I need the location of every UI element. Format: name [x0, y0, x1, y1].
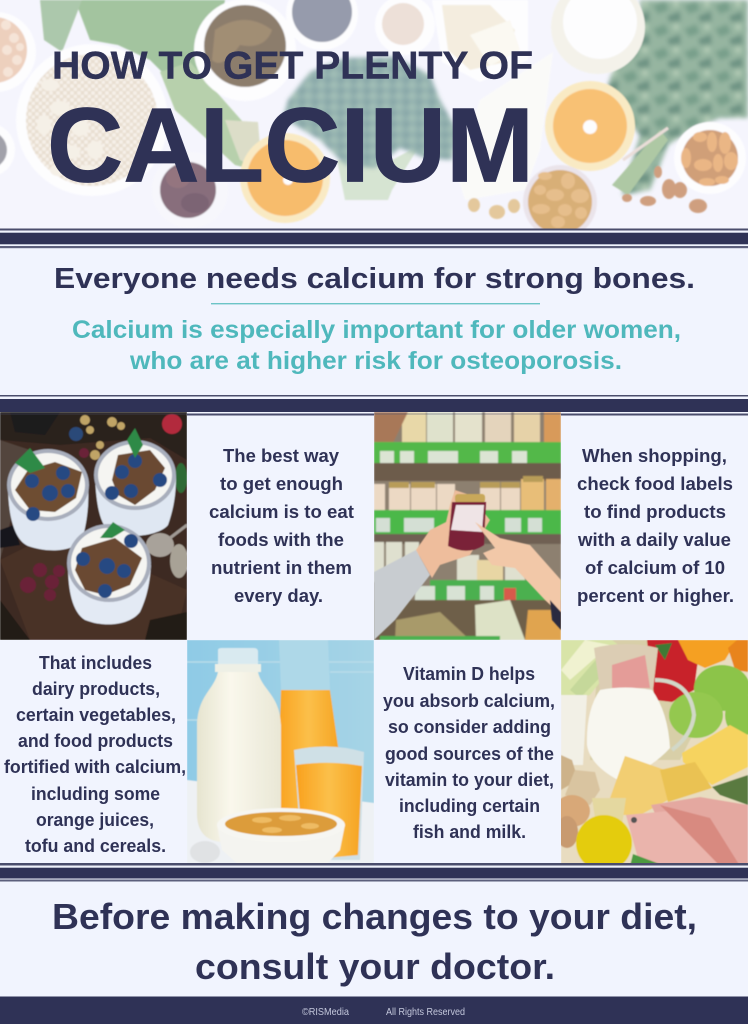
text block: vitamin d — [383, 664, 555, 842]
title: how to get plenty of: HOW TO GET PLENTY OF — [52, 44, 533, 88]
text block: best way: every day. — [234, 586, 323, 606]
parsley — [605, 0, 748, 195]
juice glass — [294, 746, 364, 860]
bread — [561, 755, 578, 790]
teal rule — [211, 303, 540, 304]
text block: vitamin d: fish and milk. — [413, 822, 526, 842]
chia bowl — [290, 0, 354, 44]
text block: that includes: and food products — [18, 731, 173, 751]
small left bowl — [0, 133, 8, 166]
dates bowl — [159, 162, 216, 219]
almond bowl — [678, 121, 740, 188]
lower jars — [374, 542, 525, 585]
photo: milk, juice and cereal — [187, 640, 374, 866]
text block: best way: nutrient in them — [211, 558, 352, 578]
jar in hand — [455, 494, 485, 503]
text block: best way: The best way — [223, 446, 339, 466]
chocolate pieces — [10, 412, 60, 435]
text block: that includes: fortified with calcium, — [4, 757, 186, 777]
subheading line two: who are at higher risk for osteoporosis. — [129, 347, 622, 375]
text block: that includes: That includes — [39, 653, 152, 673]
middle divider band — [0, 395, 748, 412]
text block: when shopping: When shopping, — [582, 446, 727, 466]
side glass — [561, 695, 587, 765]
orange — [678, 640, 737, 668]
white beans bowl — [24, 49, 159, 188]
text block: vitamin d: Vitamin D helps — [403, 664, 535, 684]
dark bowl — [193, 2, 288, 93]
divider over text panels — [0, 414, 748, 416]
text block: best way: foods with the — [218, 530, 344, 550]
photo: yogurt parfaits — [0, 412, 188, 640]
text block: vitamin d: you absorb calcium, — [383, 691, 555, 711]
title: calcium: CALCIUM — [47, 86, 534, 204]
closing line two: consult your doctor. — [195, 946, 555, 987]
text block: vitamin d: good sources of the — [385, 744, 554, 764]
white plate — [455, 52, 553, 200]
text block: when shopping: with a daily value — [577, 530, 731, 550]
text block: that includes: tofu and cereals. — [25, 836, 166, 856]
panel: header food photo — [0, 0, 748, 239]
top divider band — [0, 228, 748, 248]
green shelf one — [374, 442, 561, 463]
backdrop behind produce — [590, 640, 700, 760]
text block: when shopping: check food labels — [577, 474, 733, 494]
green shelf three — [430, 580, 561, 600]
glass left — [8, 485, 88, 550]
text block: when shopping: of calcium of 10 — [585, 558, 725, 578]
text block: that includes — [4, 653, 186, 856]
apples — [694, 665, 748, 711]
celery — [561, 640, 625, 700]
cut orange left — [240, 133, 330, 223]
photo: dairy, produce and fish — [554, 640, 748, 871]
text block: when shopping: to find products — [584, 502, 726, 522]
glass back right — [95, 475, 176, 536]
spoons — [146, 533, 174, 557]
text block: best way: calcium is to eat — [209, 502, 354, 522]
bottom divider band — [0, 863, 748, 882]
broccoli — [283, 57, 457, 168]
milk pitcher — [594, 644, 658, 690]
subheading line one: Calcium is especially important for older women, — [72, 316, 681, 344]
top jars — [374, 412, 561, 444]
mint leaves — [15, 448, 45, 473]
text block: best way — [209, 446, 354, 606]
cut orange right — [545, 81, 635, 171]
broccoli stalk — [337, 150, 415, 200]
chickpea bowl — [2, 16, 28, 84]
oil bottle — [592, 798, 626, 825]
text block: that includes: dairy products, — [32, 679, 160, 699]
peppers — [647, 640, 698, 702]
text block: that includes: orange juices, — [36, 810, 154, 830]
eggs — [554, 795, 590, 827]
scattered berries and nuts — [20, 448, 89, 601]
tofu — [441, 4, 514, 71]
cereal bowl — [217, 825, 345, 866]
text block: vitamin d: vitamin to your diet, — [385, 770, 554, 790]
fish — [651, 797, 748, 866]
middle jars — [374, 479, 561, 512]
spoon — [190, 841, 220, 863]
closing line one: Before making changes to your diet, — [52, 896, 697, 937]
text block: best way: to get enough — [220, 474, 343, 494]
rights reserved: All Rights Reserved — [386, 1006, 465, 1018]
loose almonds — [622, 166, 707, 213]
footer bar — [0, 996, 748, 1024]
asparagus — [712, 775, 748, 805]
herbs left — [78, 0, 226, 72]
glass front — [68, 565, 151, 624]
text block: when shopping — [577, 446, 734, 606]
text block: that includes: including some — [31, 784, 160, 804]
panel: closing message — [52, 896, 697, 987]
left hand — [416, 490, 490, 578]
green shelf two — [374, 510, 561, 534]
cheese — [682, 725, 748, 785]
text block: when shopping: percent or higher. — [577, 586, 734, 606]
bottom goods — [374, 600, 561, 640]
heading: everyone needs calcium: Everyone needs calcium for strong bones. — [54, 263, 695, 295]
arm sleeve — [374, 550, 430, 640]
text block: that includes: certain vegetables, — [16, 705, 176, 725]
milk bottle — [218, 648, 258, 664]
copyright: ©RISMedia — [302, 1006, 349, 1018]
apricot bowl — [523, 165, 597, 228]
small pitcher — [380, 2, 426, 46]
milk bowl — [551, 0, 645, 74]
right hand — [475, 522, 561, 615]
blueberries — [25, 454, 167, 598]
panel: intro message — [54, 263, 695, 375]
juice carafe — [279, 640, 330, 690]
text block: vitamin d: including certain — [399, 796, 540, 816]
photo: shopper reading jar label — [374, 412, 561, 640]
text block: vitamin d: so consider adding — [388, 717, 551, 737]
